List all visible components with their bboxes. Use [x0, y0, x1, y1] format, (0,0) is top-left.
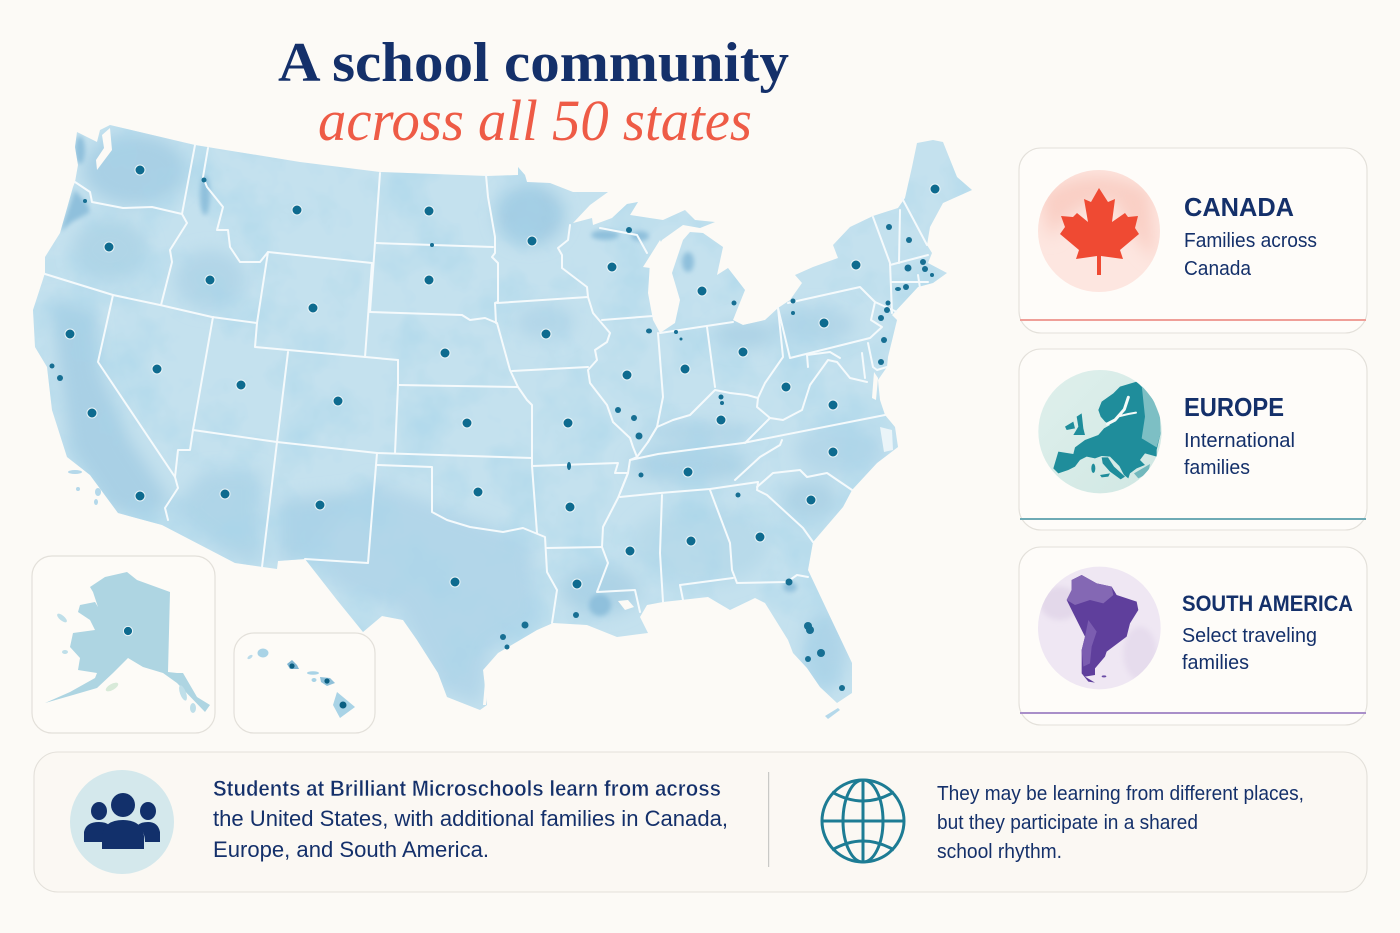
inset: Alaska — [32, 556, 215, 733]
water cut-outs — [96, 128, 922, 705]
Hawaii islands — [247, 648, 355, 718]
Hawaii dots — [289, 663, 346, 708]
South America text: SOUTH AMERICA — [1182, 591, 1353, 616]
footer right text: school rhythm. — [937, 841, 1062, 863]
heading line two: across all 50 states — [318, 88, 752, 153]
land watercolor — [20, 120, 990, 720]
Canada text — [1184, 192, 1317, 280]
Europe text: International — [1184, 430, 1295, 452]
Canada text: Canada — [1184, 258, 1252, 280]
panel: footer summary — [34, 752, 1367, 892]
footer card — [34, 752, 1367, 892]
Alaska dot — [123, 626, 133, 636]
footer left text: Students at Brilliant Microschools learn from across — [213, 776, 721, 801]
Europe text: EUROPE — [1184, 392, 1284, 422]
South America text: Select traveling — [1182, 625, 1317, 647]
footer right text — [937, 783, 1304, 863]
map: contiguous United States — [20, 120, 990, 720]
inset: Hawaii — [234, 633, 375, 733]
Hawaii frame — [234, 633, 375, 733]
South America card — [1019, 547, 1367, 725]
panel: Europe — [1019, 349, 1367, 530]
icon: people group — [70, 770, 174, 874]
Canada text: CANADA — [1184, 192, 1294, 222]
South America text — [1182, 591, 1353, 674]
icon: globe — [822, 780, 904, 862]
title — [278, 32, 789, 153]
Canada card — [1019, 148, 1367, 333]
footer left text: Europe, and South America. — [213, 837, 489, 862]
panel: Canada — [1019, 148, 1367, 333]
Alaska land — [45, 572, 210, 712]
panel: South America — [1019, 547, 1367, 725]
heading line one: A school community — [278, 32, 789, 94]
Europe card — [1019, 349, 1367, 530]
islands off the coast — [68, 470, 840, 719]
footer right text: but they participate in a shared — [937, 812, 1198, 834]
South America accent line — [1020, 712, 1366, 714]
Europe text: families — [1184, 457, 1250, 479]
footer right text: They may be learning from different places, — [937, 783, 1304, 805]
small metro dots — [50, 178, 934, 691]
Europe accent line — [1020, 518, 1366, 520]
South America text: families — [1182, 652, 1249, 674]
icon: South America map — [1038, 567, 1161, 689]
footer left text — [213, 776, 728, 862]
divider — [768, 772, 769, 867]
state borders — [45, 145, 928, 623]
location dots — [65, 165, 940, 589]
footer left text: the United States, with additional families in Canada, — [213, 806, 728, 831]
Europe text — [1184, 392, 1295, 479]
Canada text: Families across — [1184, 230, 1317, 252]
Alaska frame — [32, 556, 215, 733]
icon: maple leaf — [1038, 170, 1160, 292]
Canada accent line — [1020, 319, 1366, 321]
Alaska islands — [56, 612, 196, 713]
icon: Europe map — [1038, 370, 1162, 493]
